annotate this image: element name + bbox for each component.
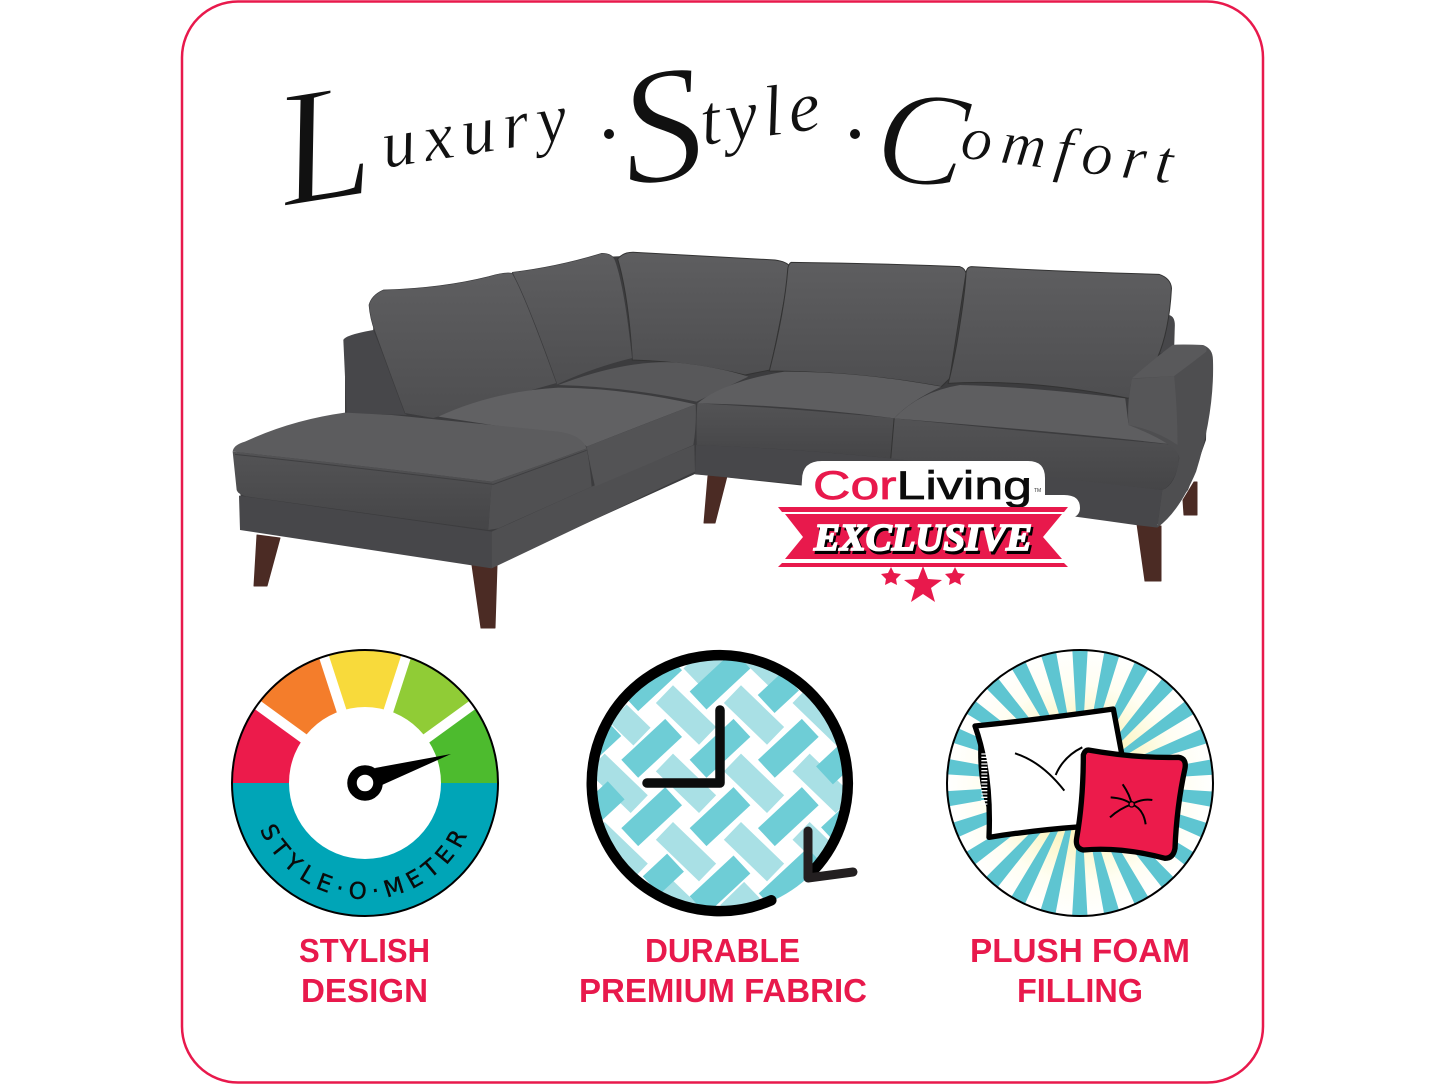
icon: plush foam pillows bbox=[947, 650, 1213, 916]
badge backing bbox=[800, 461, 1080, 530]
label: Stylish Design: DESIGN bbox=[301, 972, 428, 1009]
base bbox=[695, 445, 1162, 528]
red cushion bbox=[1076, 750, 1185, 858]
sofa underlay: dark silhouette bbox=[237, 256, 1208, 566]
frame: rounded border bbox=[182, 2, 1263, 1082]
ribbon bbox=[785, 514, 1062, 559]
inner seat bbox=[558, 362, 748, 402]
back cushion 4 bbox=[769, 262, 966, 387]
trademark: TM bbox=[1034, 488, 1041, 494]
sofa: right section bbox=[695, 262, 1213, 528]
chaise seam bbox=[235, 450, 587, 484]
back cushion 1 bbox=[369, 273, 557, 418]
icon: durable fabric clock bbox=[580, 645, 862, 921]
label: Durable Premium Fabric bbox=[579, 932, 867, 1009]
chaise top bbox=[233, 413, 587, 482]
back cushion 2 bbox=[512, 253, 632, 385]
right arm top bbox=[1132, 345, 1207, 378]
label: Stylish Design bbox=[299, 932, 430, 1009]
chaise front bbox=[233, 452, 492, 530]
bullet bbox=[604, 129, 614, 139]
sofa: left section bbox=[233, 252, 790, 568]
label: Plush Foam Filling: FILLING bbox=[1017, 972, 1143, 1009]
clock hands bbox=[647, 710, 720, 783]
ribbon text: EXCLUSIVE bbox=[813, 517, 1032, 559]
title: Luxury Style Comfort bbox=[261, 12, 1191, 245]
right arm bbox=[1128, 345, 1213, 528]
clock ring bbox=[592, 655, 848, 911]
seat 2 front bbox=[891, 418, 1179, 490]
arrow head bbox=[808, 831, 853, 878]
word: Comfort: omfort bbox=[957, 104, 1186, 198]
bullet bbox=[850, 129, 860, 139]
seat 1 top bbox=[697, 372, 941, 418]
icon: style-o-meter gauge bbox=[231, 649, 499, 917]
sofa: grey sectional bbox=[233, 252, 1213, 628]
word: Style: S bbox=[608, 29, 715, 222]
gauge segments bbox=[232, 705, 365, 783]
label: Plush Foam Filling bbox=[970, 932, 1190, 1009]
seat 1 front bbox=[697, 403, 894, 458]
badge: CorLiving Exclusive bbox=[778, 461, 1080, 602]
back arm bbox=[343, 330, 407, 415]
label: Durable Premium Fabric: DURABLE bbox=[645, 932, 800, 969]
word: Luxury: L bbox=[261, 46, 382, 242]
back cushion 5 bbox=[948, 267, 1171, 398]
sunburst bbox=[947, 650, 1213, 916]
word: Comfort: C bbox=[868, 60, 978, 219]
sofa legs bbox=[254, 476, 1197, 628]
woven pattern bbox=[580, 645, 862, 921]
stars bbox=[881, 566, 965, 602]
label: Plush Foam Filling: PLUSH FOAM bbox=[970, 932, 1190, 969]
seat top bbox=[438, 388, 696, 447]
white pillow bbox=[975, 709, 1122, 837]
word: Luxury: uxury bbox=[376, 77, 580, 183]
seat 2 top bbox=[894, 385, 1178, 445]
seat front bbox=[587, 404, 696, 487]
label: Durable Premium Fabric: PREMIUM FABRIC bbox=[579, 972, 867, 1009]
ribbon text shadow: EXCLUSIVE bbox=[815, 520, 1034, 562]
logo: CorLiving: Cor Living bbox=[813, 464, 1032, 508]
right arm front panel bbox=[1128, 376, 1178, 445]
back arm nub bbox=[1156, 315, 1175, 355]
word: Style: tyle bbox=[695, 64, 830, 161]
label: Stylish Design: STYLISH bbox=[299, 932, 430, 969]
base bbox=[239, 496, 492, 568]
ribbon strips bbox=[778, 507, 1068, 512]
seat divider bbox=[891, 418, 894, 458]
needle bbox=[352, 754, 451, 796]
back cushion corner bbox=[618, 252, 790, 375]
gauge label: STYLE·O·METER bbox=[260, 824, 468, 900]
